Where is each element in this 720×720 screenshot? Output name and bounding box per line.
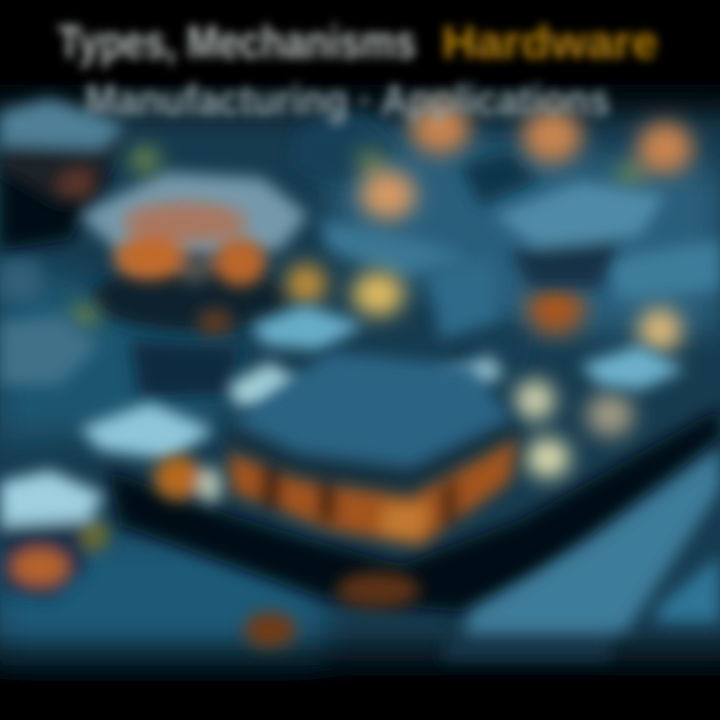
background streaks (130, 115, 720, 400)
main central building (225, 352, 520, 546)
title line 2: Manufacturing · Applications (85, 76, 610, 125)
top left platform (0, 98, 125, 205)
bottom left platform (0, 470, 109, 600)
scattered lamps (71, 102, 693, 478)
title highlight: Hardware (442, 16, 658, 68)
title line 1: Types, Mechanisms (58, 16, 416, 68)
title (58, 16, 658, 125)
lower orange glows (154, 308, 420, 648)
lower right diagonal panel (440, 448, 720, 660)
upper left bowl (78, 172, 308, 332)
light blue platforms (0, 182, 685, 460)
dark diagonal channel (0, 150, 720, 612)
